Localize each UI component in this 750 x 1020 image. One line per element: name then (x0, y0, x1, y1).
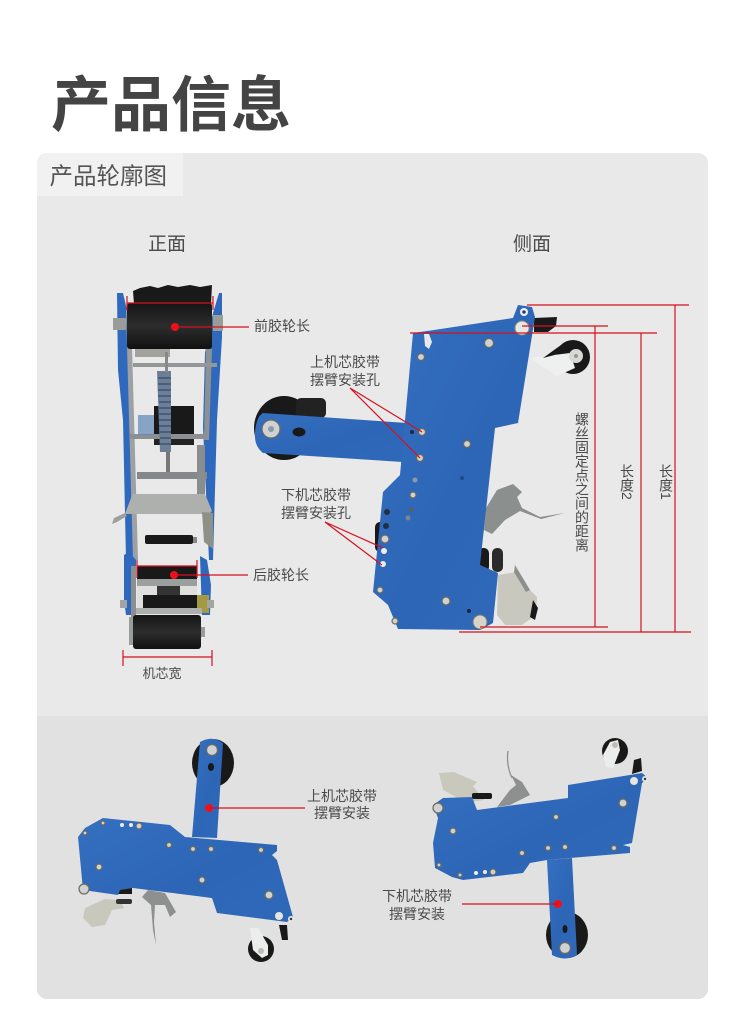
callout: lower core arm mounting holes (281, 487, 383, 565)
label: length 1: 长度1 (658, 464, 674, 500)
callout: front roller length: 前胶轮长 (254, 318, 310, 334)
panel: product outline (37, 153, 708, 999)
callout: lower core arm mounting holes: 摆臂安装孔 (281, 505, 351, 521)
callout: lower core arm install: 下机芯胶带 (382, 888, 452, 904)
callout: upper core arm mounting holes (310, 354, 422, 458)
machine: lower arm assembly (433, 738, 648, 958)
callout: upper core arm mounting holes: 上机芯胶带 (310, 354, 380, 370)
callout: upper core arm mounting holes: 摆臂安装孔 (310, 372, 380, 388)
machine: side view (254, 305, 590, 630)
callout: lower core arm install: 摆臂安装 (389, 906, 445, 922)
callout: upper core arm install (205, 788, 377, 821)
dimension: core width: 机芯宽 (142, 666, 182, 681)
dimension lines: length 1, length 2, screw spacing (410, 305, 691, 632)
section tab heading (37, 153, 183, 196)
dimension: front roller width (127, 296, 213, 310)
callout: lower core arm mounting holes: 下机芯胶带 (281, 487, 351, 503)
callout: upper core arm install: 摆臂安装 (314, 805, 370, 821)
callout: upper core arm install: 上机芯胶带 (307, 788, 377, 804)
heading: side view: 侧面 (513, 233, 551, 255)
callout: front roller length (171, 318, 310, 334)
machine: upper arm assembly (78, 739, 294, 962)
callout: rear roller length (137, 560, 309, 583)
callout: rear roller length: 后胶轮长 (253, 567, 309, 583)
dimension: core width (123, 650, 212, 681)
machine: front view (112, 285, 223, 649)
callout: lower core arm install (382, 888, 562, 922)
heading: front view: 正面 (148, 234, 186, 255)
label: length 2: 长度2 (619, 464, 635, 500)
section tab heading: 产品轮廓图 (50, 163, 167, 189)
label: screw fixing point distance: 螺丝固定点之间的距离 (574, 412, 590, 552)
title: 产品信息 (51, 72, 291, 139)
